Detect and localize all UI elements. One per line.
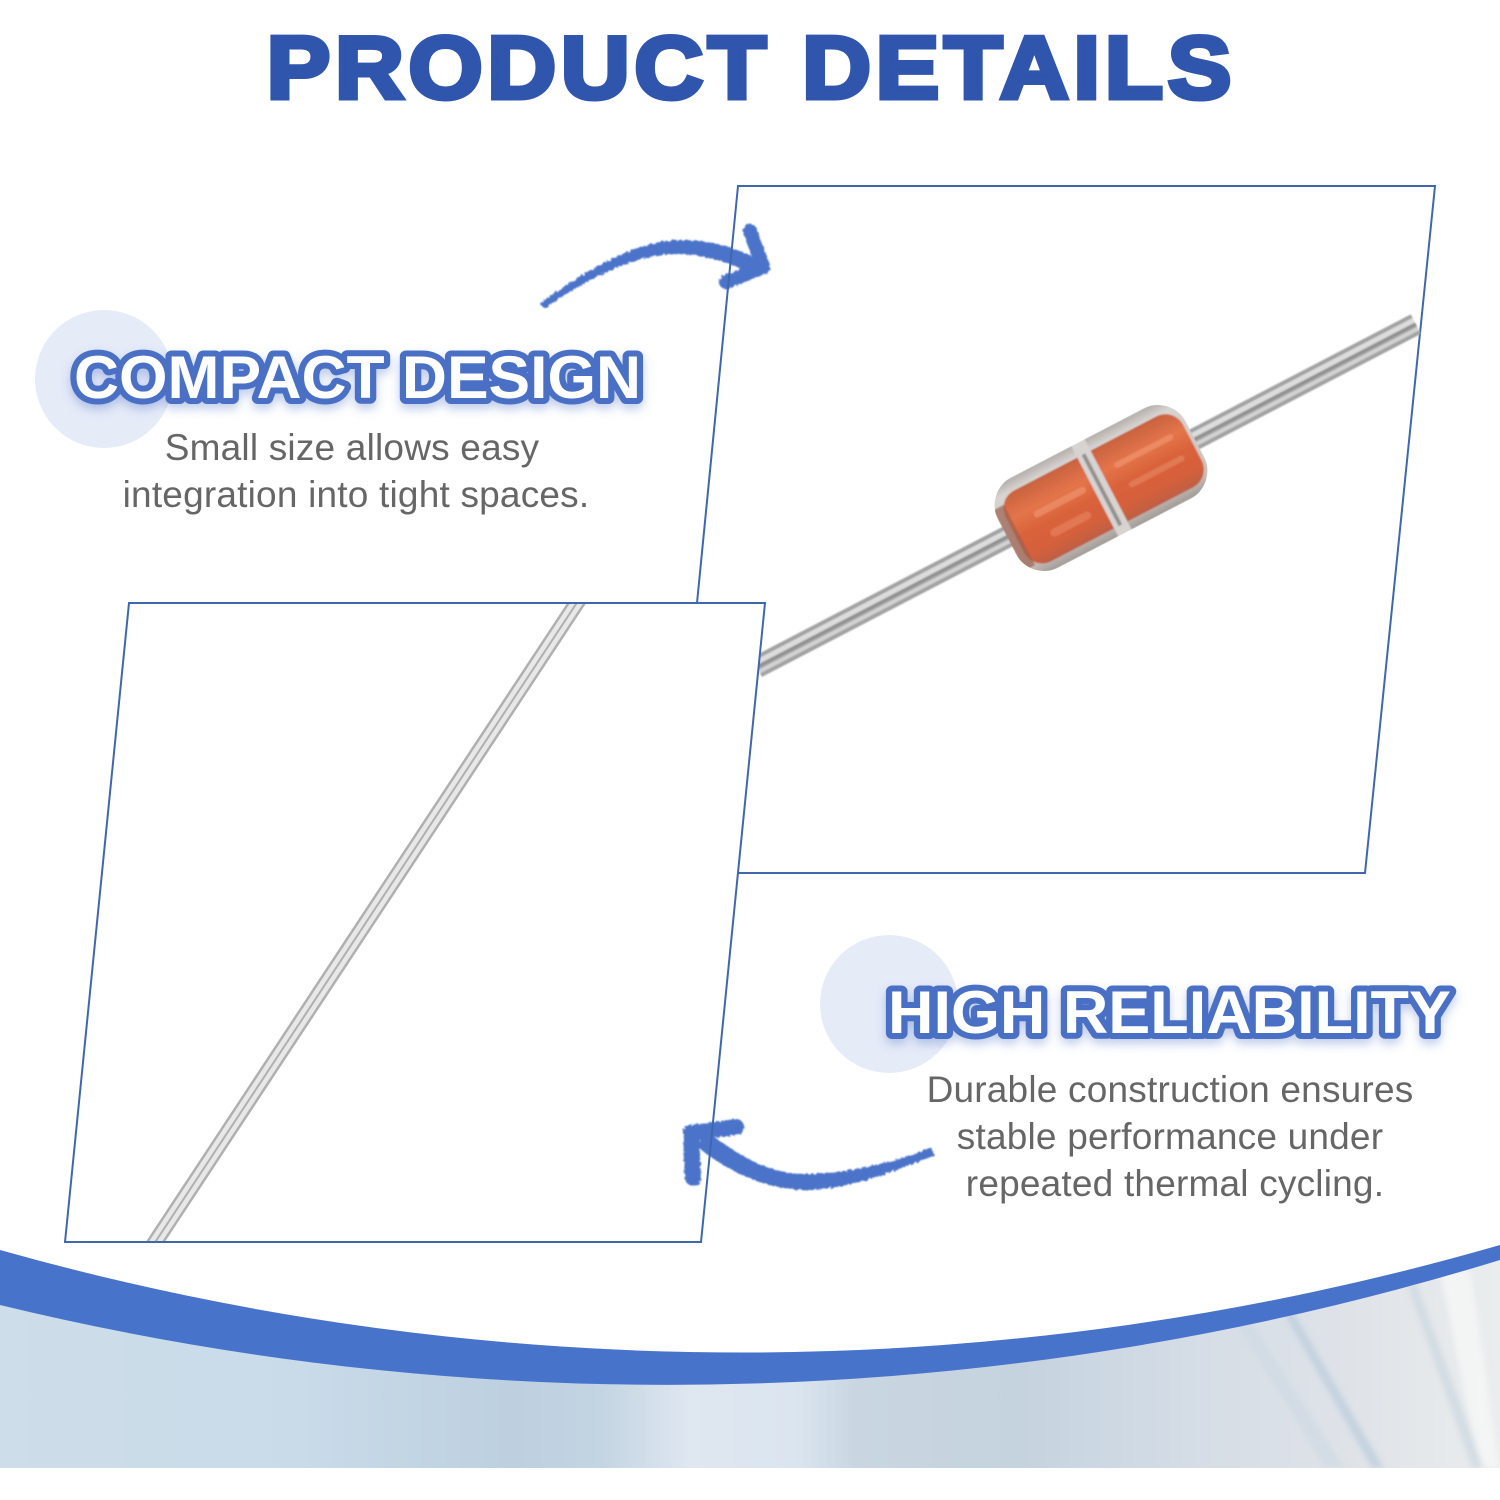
text: high reliability description: Durable construction ensures xyxy=(927,1069,1413,1110)
text: high reliability description xyxy=(927,1069,1413,1204)
text: compact design description xyxy=(123,427,589,515)
heading: high reliability: HIGH RELIABILITY xyxy=(888,979,1451,1046)
thermistor component xyxy=(759,314,1422,678)
text: compact design description: integration into tight spaces. xyxy=(123,474,589,515)
circle accent: compact design xyxy=(35,310,173,448)
heading: compact design: COMPACT DESIGN xyxy=(74,344,641,411)
panel: lead wire photo xyxy=(65,595,933,1250)
circle accent: high reliability xyxy=(820,935,958,1073)
text: high reliability description: repeated thermal cycling. xyxy=(966,1163,1384,1204)
arrow: to component photo xyxy=(541,231,763,307)
text: high reliability description: stable performance under xyxy=(957,1116,1383,1157)
blue curved band xyxy=(0,1245,1500,1385)
arrow: to lead wire xyxy=(691,1127,933,1189)
glass diode body xyxy=(994,405,1208,571)
text: compact design description: Small size allows easy xyxy=(165,427,540,468)
footer background xyxy=(0,1250,1500,1468)
lead wire xyxy=(150,595,582,1250)
title: PRODUCT DETAILS xyxy=(267,19,1231,117)
panel: component photo frame xyxy=(697,186,1435,873)
component lead wire xyxy=(752,314,1421,677)
